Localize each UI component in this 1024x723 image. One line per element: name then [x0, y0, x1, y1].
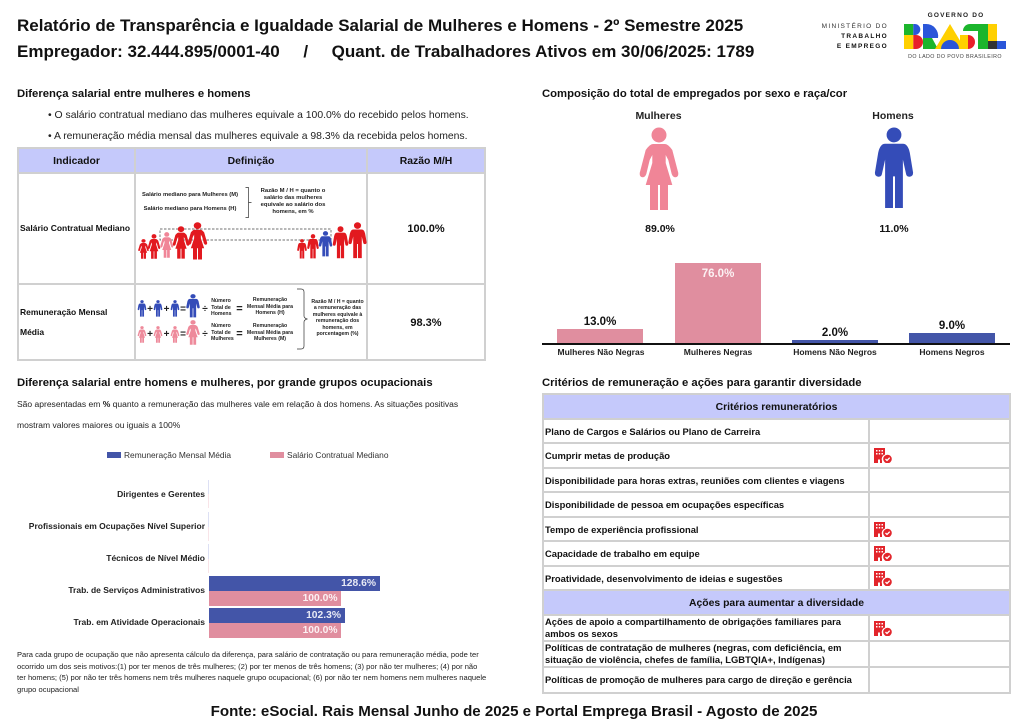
row 2 ratio: 98.3%: [410, 317, 442, 329]
icon: capacidade: [874, 546, 892, 561]
intro text: mostram valores maiores ou iguais a 100%: [17, 420, 180, 430]
row value: [868, 491, 1011, 518]
diagram explanation: [260, 188, 326, 215]
label: homens: Homens: [872, 110, 914, 122]
icon: cumprir metas: [874, 448, 892, 463]
logo: ministério: TRABALHO: [841, 33, 888, 40]
diagram labels: Salário mediano para Mulheres (M): [142, 192, 238, 198]
diagram labels: [142, 192, 238, 212]
row: [542, 467, 870, 493]
value: homens: 11.0%: [879, 223, 909, 235]
row: [542, 418, 870, 444]
label: número de mulheres: Total de: [211, 330, 231, 336]
logo: ministério: [822, 22, 888, 50]
diagram: remuneração média: =: [236, 328, 243, 340]
footnote: [17, 650, 486, 694]
heading: diferença salarial: Diferença salarial entre mulheres e homens: [17, 88, 251, 100]
diagram explanation: equivale ao salário dos: [261, 202, 325, 208]
category: Homens Negros: [919, 347, 985, 357]
row: atividade operacional: Trab. em Atividade Operacionais: [74, 617, 205, 627]
chart: composition by race: [542, 263, 1010, 357]
logo: ministério: E EMPREGO: [837, 43, 888, 50]
table header: razão: [366, 147, 486, 174]
label: remuneração mulheres: Mulheres (M): [254, 336, 286, 342]
row 2 ratio: [366, 283, 486, 361]
label: número de homens: [211, 298, 232, 317]
diagram labels: Salário mediano para Homens (H): [144, 206, 236, 212]
heading: grupos ocupacionais: Diferença salarial entre homens e mulheres, por grande grupos ocupacionais: [17, 377, 433, 389]
explanation: [311, 299, 364, 337]
category: Homens Não Negros: [793, 347, 877, 357]
row: Capacidade de trabalho em equipe: [545, 548, 700, 559]
row value: [868, 516, 1011, 542]
heading: critérios: Critérios de remuneração e ações para garantir diversidade: [542, 377, 862, 389]
bar: homens não negros: [792, 340, 878, 343]
row: técnicos: Técnicos de Nível Médio: [106, 553, 205, 563]
row value: [868, 540, 1011, 567]
row: situação de violência, chefes de família, LGBTQIA+, Indígenas): [545, 654, 825, 665]
label: remuneração mulheres: [247, 323, 294, 342]
row 2 indicator: Média: [20, 327, 44, 337]
category labels: Mulheres Não Negras: [558, 347, 644, 357]
diagram: remuneração média: +: [147, 329, 153, 340]
table header: indicador: Indicador: [53, 156, 100, 167]
label: número de mulheres: [211, 323, 234, 342]
section header: ações: [542, 589, 1011, 616]
bullet: salário contratual: • O salário contratual mediano das mulheres equivale a 100.0% do recebido pelos homens.: [48, 110, 469, 121]
row 1 definition cell: [134, 172, 368, 285]
row: Disponibilidade de pessoa em ocupações específicas: [545, 499, 784, 510]
value: 13.0%: [584, 316, 616, 328]
icon: woman: [640, 128, 678, 210]
diagram: salário mediano: [138, 187, 367, 260]
row: [542, 565, 870, 591]
label: número de homens: Homens: [211, 311, 231, 317]
icon: tempo: [874, 522, 892, 537]
diagram: remuneração média: ÷: [202, 329, 208, 340]
row: Políticas de contratação de mulheres (negras, com deficiência, em: [545, 642, 841, 653]
bar: mulheres não negras: [557, 329, 643, 343]
diagram explanation: Razão M / H = quanto o: [261, 188, 325, 194]
label: número de homens: Número: [211, 298, 231, 304]
row value: [868, 442, 1011, 469]
intro text: São apresentadas em % quanto a remuneração das mulheres vale em relação à dos homens. As situações positivas: [17, 399, 458, 409]
row: Cumprir metas de produção: [545, 450, 670, 461]
explanation: remuneração dos: [316, 318, 359, 324]
chart: occupational groups: [29, 480, 380, 638]
row: serviços administrativos: Trab. de Serviços Administrativos: [68, 585, 205, 595]
source: Fonte: eSocial. Rais Mensal Junho de 2025 e Portal Emprega Brasil - Agosto de 2025: [211, 703, 817, 720]
explanation: porcentagem (%): [316, 331, 359, 337]
icon: proatividade: [874, 571, 892, 586]
explanation: Razão M / H = quanto: [311, 299, 364, 305]
axis: [542, 343, 1010, 345]
row: [542, 640, 870, 668]
row: [542, 540, 870, 567]
diagram: remuneração média: [138, 288, 364, 350]
panel: indicator table: [17, 147, 486, 361]
row value: [868, 418, 1011, 444]
row: Políticas de promoção de mulheres para cargo de direção e gerência: [545, 674, 852, 685]
diagram: remuneração média: ÷: [202, 304, 208, 315]
logo: governo do brasil: GOVERNO DO: [928, 12, 984, 19]
panel: criteria table: [542, 393, 1011, 694]
row: profissionais: Profissionais em Ocupações Nível Superior: [29, 521, 205, 531]
bar: 100.0: 100.0%: [303, 593, 338, 604]
label: número de homens: Total de: [211, 304, 231, 310]
row value: [868, 614, 1011, 642]
row: ambos os sexos: [545, 628, 618, 639]
label: número de mulheres: Número: [211, 323, 231, 329]
logo: governo do brasil: DO LADO DO POVO BRASILEIRO: [908, 54, 1002, 60]
row 2 indicator: [17, 283, 136, 361]
row value: [868, 666, 1011, 694]
bar: homens negros: [909, 333, 995, 343]
row 2 definition cell: [134, 283, 368, 361]
row 1 indicator: Salário Contratual Mediano: [20, 223, 130, 233]
row: Proatividade, desenvolvimento de ideias e sugestões: [545, 573, 783, 584]
section header: ações: Ações para aumentar a diversidade: [689, 598, 864, 609]
section header: critérios: Critérios remuneratórios: [716, 402, 837, 413]
footnote: grupo ocupacional: [17, 684, 79, 694]
row 1 ratio: 100.0%: [407, 223, 445, 235]
logo: governo do brasil: [904, 12, 1006, 60]
title: Relatório de Transparência e Igualdade Salarial de Mulheres e Homens - 2º Semestre 2025: [17, 16, 743, 35]
label: remuneração homens: [247, 297, 294, 316]
bar: 100.0: 100.0%: [303, 625, 338, 636]
legend: remuneração: Remuneração Mensal Média: [124, 450, 231, 460]
row: [542, 666, 870, 694]
row 1 indicator: [17, 172, 136, 285]
diagram: remuneração média: =: [180, 304, 186, 315]
table header: indicador: [17, 147, 136, 174]
footnote: Para cada grupo de ocupação que não apresenta cálculo da diferença, para salário de contratação ou para remuneração média, pode ter: [17, 650, 479, 659]
row: [542, 491, 870, 518]
row: dirigentes: Dirigentes e Gerentes: [117, 489, 205, 499]
table header: razão: Razão M/H: [400, 156, 452, 167]
row: Ações de apoio a compartilhamento de obrigações familiares para: [545, 616, 841, 627]
label: remuneração homens: Remuneração: [253, 297, 287, 303]
row 1 ratio: [366, 172, 486, 285]
table header: definição: Definição: [228, 156, 274, 167]
row value: [868, 565, 1011, 591]
diagram: remuneração média: =: [236, 303, 243, 315]
intro text: [17, 399, 458, 430]
label: remuneração mulheres: Mensal Média para: [247, 330, 293, 336]
row value: [868, 467, 1011, 493]
diagram explanation: homens, em %: [272, 209, 314, 215]
row 2 indicator: Remuneração Mensal: [20, 307, 107, 317]
row value: [868, 640, 1011, 668]
label: remuneração homens: Mensal Média para: [247, 304, 293, 310]
row: [542, 516, 870, 542]
section header: critérios: [542, 393, 1011, 420]
bar: 102.3: 102.3%: [306, 610, 341, 621]
explanation: mulheres equivale à: [313, 312, 362, 318]
row: [542, 442, 870, 469]
icon: man: [874, 128, 914, 208]
diagram explanation: salário das mulheres: [264, 195, 322, 201]
footnote: ter homens; (5) por não ter três homens nem três mulheres naquele grupo ocupacional; (6) por não ter nem homens nem mulheres naquele: [17, 673, 486, 682]
bar: 128.6: [208, 576, 380, 591]
diagram: remuneração média: +: [164, 329, 170, 340]
category: Mulheres Negras: [684, 347, 752, 357]
row: Tempo de experiência profissional: [545, 524, 699, 535]
bar: mulheres negras: 76.0%: [702, 268, 734, 280]
label: mulheres: Mulheres: [635, 110, 682, 122]
diagram: remuneração média: =: [180, 329, 186, 340]
label: número de mulheres: Mulheres: [211, 336, 234, 342]
employer line: Empregador: 32.444.895/0001-40 / Quant. de Trabalhadores Ativos em 30/06/2025: 1789: [17, 42, 754, 61]
label: remuneração homens: Homens (H): [255, 310, 285, 316]
value: mulheres: 89.0%: [645, 223, 675, 235]
value: 2.0%: [822, 327, 848, 339]
bullet: remuneração média: • A remuneração média mensal das mulheres equivale a 98.3% da recebida pelos homens.: [48, 131, 468, 142]
legend: salário: Salário Contratual Mediano: [287, 450, 388, 460]
explanation: homens, em: [322, 325, 353, 331]
value: 9.0%: [939, 320, 965, 332]
bar: 100.0: [208, 591, 341, 606]
heading: composição: Composição do total de empregados por sexo e raça/cor: [542, 88, 847, 100]
diagram: remuneração média: +: [164, 304, 170, 315]
footnote: ocorrido um dos seis motivos:(1) por ter menos de três mulheres; (2) por ter menos de três homens; (3) por não ter mulheres; (4) por não: [17, 662, 477, 670]
bar: mulheres negras: [675, 263, 761, 343]
table header: definição: [134, 147, 368, 174]
row: Plano de Cargos e Salários ou Plano de Carreira: [545, 426, 760, 437]
diagram: remuneração média: +: [147, 304, 153, 315]
label: remuneração mulheres: Remuneração: [253, 323, 287, 329]
explanation: a remuneração das: [314, 305, 361, 311]
icon: ações de apoio: [874, 621, 892, 636]
row: [542, 614, 870, 642]
logo: ministério: MINISTÉRIO DO: [822, 23, 888, 30]
row: Disponibilidade para horas extras, reuniões com clientes e viagens: [545, 475, 845, 486]
bar: 102.3: [208, 608, 344, 623]
bar: 128.6: 128.6%: [341, 578, 376, 589]
bar: 100.0: [208, 623, 341, 638]
